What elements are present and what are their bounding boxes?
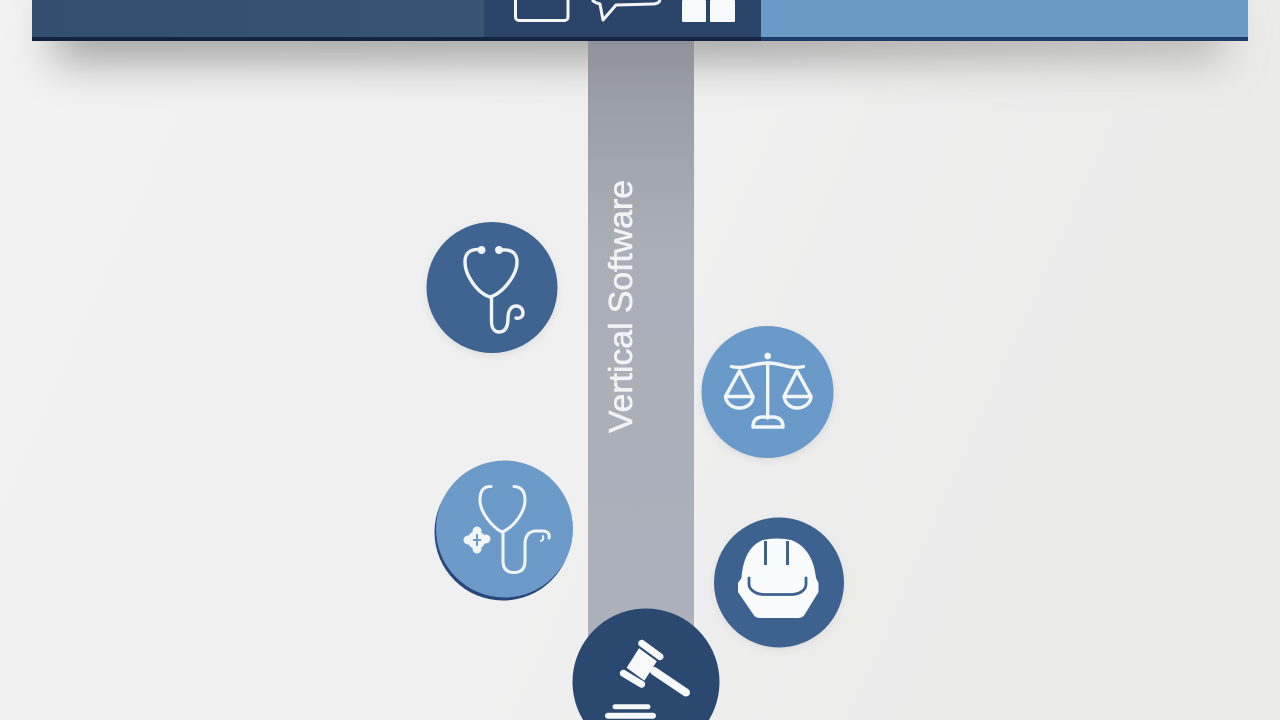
top header bar (32, 0, 1248, 41)
bar bottom edge left (32, 37, 761, 41)
icon: twin blocks (682, 0, 735, 22)
bar centre segment (484, 0, 761, 38)
circle: stethoscope dark (426, 222, 558, 354)
icon: stethoscope with flower (480, 486, 549, 572)
vertical column (588, 41, 694, 720)
icon: small flower with cross (464, 526, 490, 554)
icon: balance scales (726, 353, 811, 427)
bar left segment (32, 0, 484, 38)
icon: speech bubble (592, 0, 660, 20)
icon: gavel (608, 643, 686, 716)
circle: gavel (572, 608, 720, 720)
bar bottom edge right (761, 37, 1248, 41)
circle: stethoscope light (434, 460, 573, 600)
circle: scales of justice (702, 326, 834, 459)
circle: hard hat (714, 518, 844, 648)
icon: hard hat (738, 538, 818, 618)
icon: stethoscope (465, 246, 523, 332)
column label: Vertical Software (602, 180, 639, 433)
icon: document square (516, 0, 568, 20)
top bar shadow (55, 5, 1225, 60)
bar right segment (761, 0, 1248, 38)
